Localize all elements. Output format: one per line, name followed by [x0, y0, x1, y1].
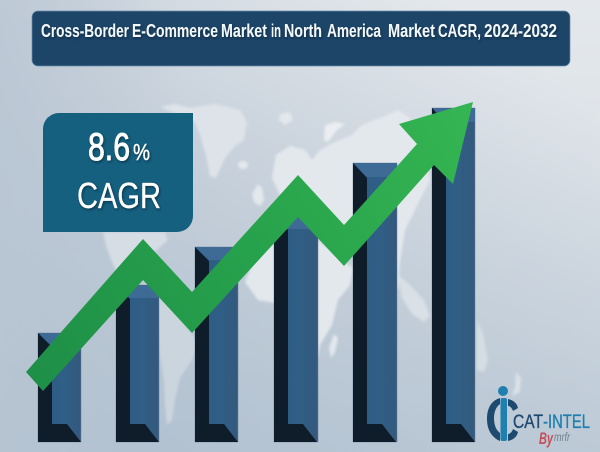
title bar [32, 11, 570, 66]
logo byline [539, 429, 571, 448]
bar 5 [353, 163, 397, 442]
logo icon [487, 386, 518, 441]
title text: E-Commerce [132, 21, 218, 41]
logo: CAT-INTEL by mrfr [487, 386, 590, 448]
map: south america [143, 282, 198, 425]
title text: in [271, 21, 281, 41]
title text: 2024-2032 [484, 21, 557, 41]
title text: Market [221, 21, 267, 41]
map: madagascar [329, 334, 338, 358]
CAGR value: % [133, 139, 150, 165]
map: north america [103, 232, 168, 275]
CAGR value: 8.6 [88, 126, 130, 169]
map: scandinavia islands [252, 184, 264, 206]
map: eurasia [272, 110, 430, 290]
bar 6 [432, 108, 475, 442]
logo byline: mrfr [554, 430, 571, 444]
map: africa [245, 232, 353, 358]
map: svalbard [279, 112, 293, 125]
map: southeast asia [398, 275, 430, 322]
title text: America [327, 21, 382, 41]
bar 1 [38, 333, 81, 442]
CAGR callout [43, 113, 193, 232]
logo wordmark: CAT [513, 412, 543, 433]
title text: Cross-Border [41, 21, 129, 41]
bar 2 [116, 285, 159, 442]
world map [103, 104, 521, 425]
title text: North [284, 21, 322, 41]
map: novaya zemlya [324, 122, 345, 142]
bar 3 [195, 247, 238, 442]
bar 4 [274, 216, 318, 442]
logo byline: By [539, 429, 554, 448]
logo wordmark [513, 412, 590, 433]
green growth arrow [26, 102, 473, 391]
map: new zealand [512, 372, 521, 396]
bar chart [38, 108, 475, 442]
map: greenland [161, 104, 247, 178]
title text: CAGR, [438, 21, 481, 41]
title text: Market [388, 21, 435, 41]
map: iceland [238, 161, 248, 169]
map: australia [477, 320, 488, 372]
title text [41, 21, 557, 41]
CAGR label: CAGR [77, 175, 161, 216]
